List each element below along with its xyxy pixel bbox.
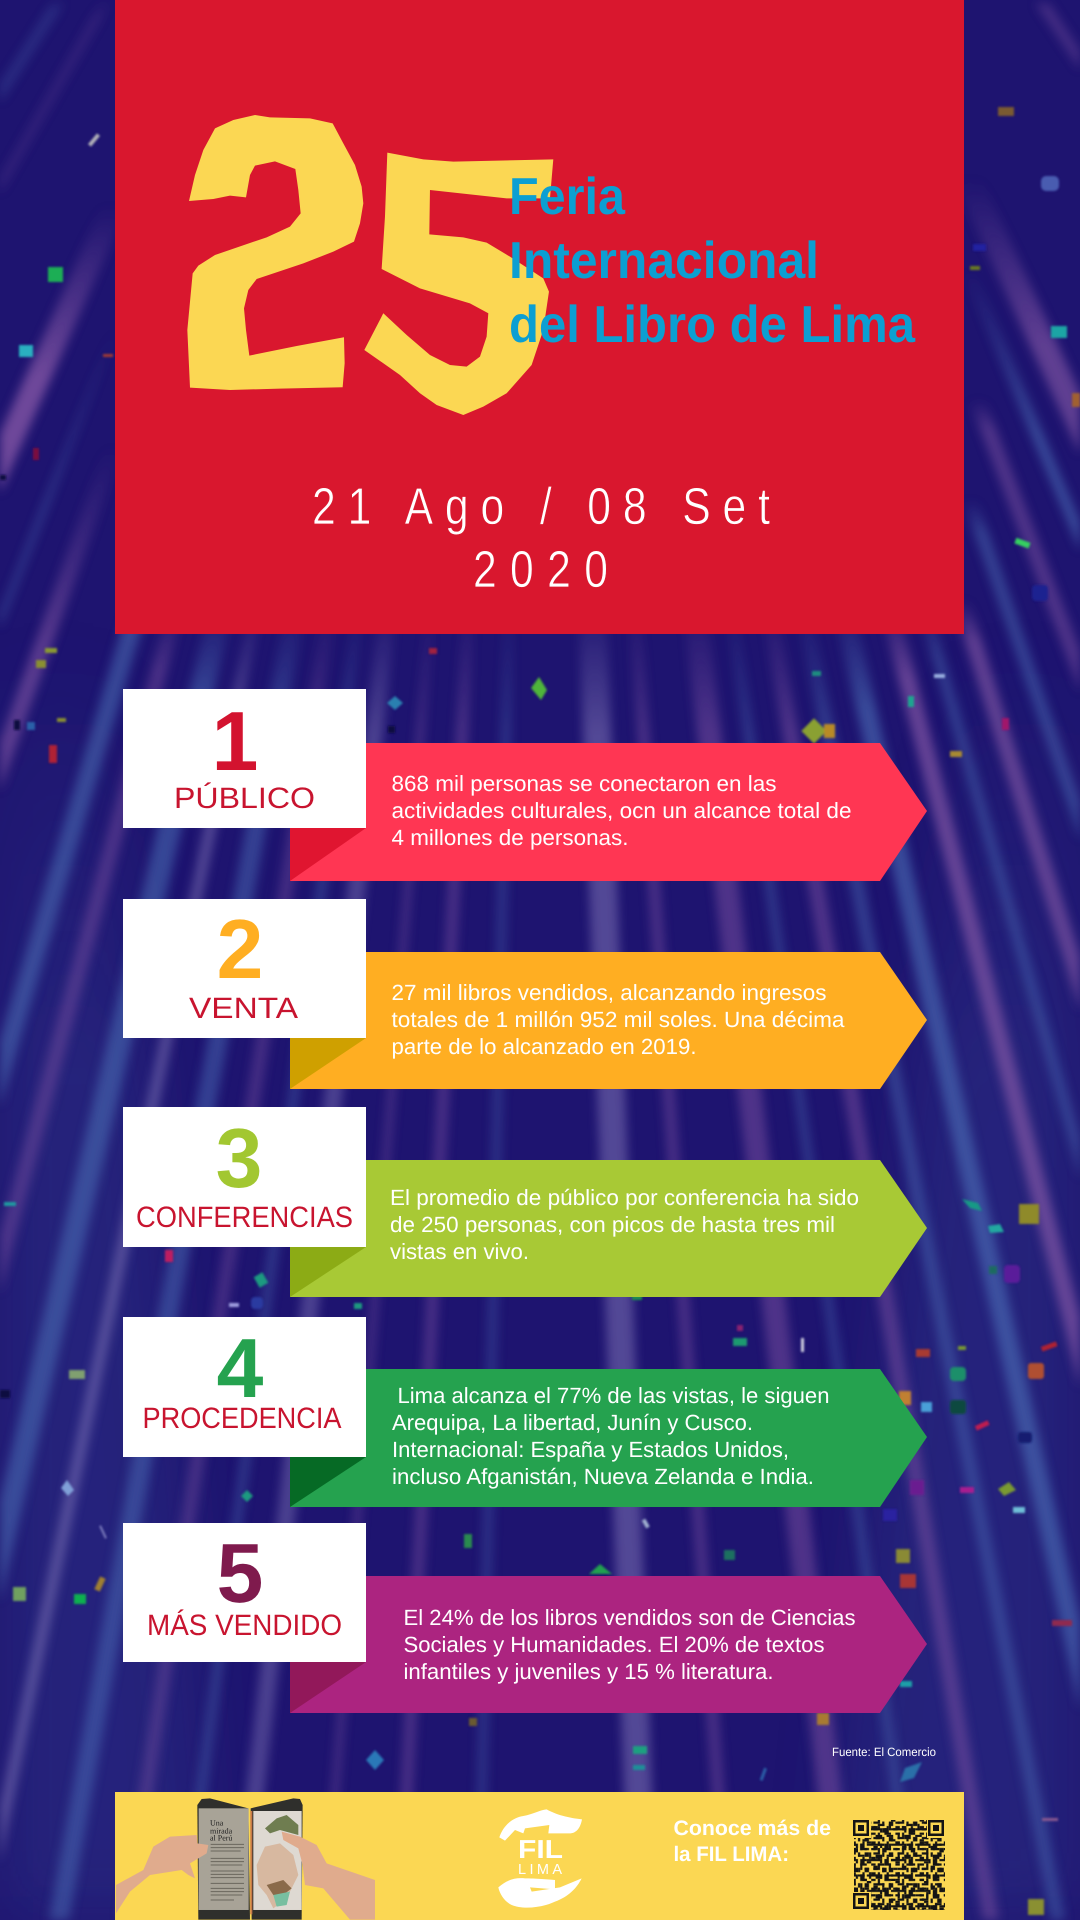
description: [392, 980, 845, 1059]
panel: 2 venta: [123, 899, 927, 1089]
description: [392, 1383, 830, 1489]
source note: Fuente: El Comercio: [832, 1745, 936, 1759]
ribbon: [290, 1576, 927, 1713]
call to action: [674, 1817, 831, 1866]
label: PROCEDENCIA: [142, 1402, 342, 1435]
description: El 24% de los libros vendidos son de Ciencias: [404, 1605, 856, 1630]
label: MÁS VENDIDO: [147, 1609, 342, 1642]
call to action: Conoce más de: [674, 1817, 831, 1840]
logo: FIL LIMA: [498, 1809, 582, 1908]
panel: red header: [115, 0, 964, 634]
number: 4: [217, 1321, 264, 1415]
panel: 1 público: [123, 689, 927, 881]
description: Arequipa, La libertad, Junín y Cusco.: [392, 1410, 753, 1435]
card: [123, 1107, 366, 1247]
ribbon: [290, 743, 927, 881]
number: 3: [216, 1111, 262, 1205]
icon: QR code: [853, 1820, 945, 1910]
card: [123, 689, 366, 828]
number: 1: [212, 694, 258, 788]
description: [390, 1185, 859, 1264]
description: 4 millones de personas.: [392, 825, 628, 850]
illustration: hands holding a folding phone: mirada: [210, 1827, 232, 1835]
description: vistas en vivo.: [390, 1239, 529, 1264]
description: El promedio de público por conferencia ha sido: [390, 1185, 859, 1210]
label: VENTA: [189, 992, 298, 1025]
description: 27 mil libros vendidos, alcanzando ingresos: [392, 980, 826, 1005]
call to action: la FIL LIMA:: [674, 1843, 789, 1866]
card: [123, 899, 366, 1038]
logo: FIL LIMA: LIMA: [518, 1862, 562, 1878]
card: [123, 1523, 366, 1662]
title: del Libro de Lima: [509, 296, 916, 354]
ribbon fold: [290, 828, 366, 881]
ribbon fold: [290, 1457, 366, 1507]
description: totales de 1 millón 952 mil soles. Una décima: [392, 1007, 845, 1032]
dates: [312, 478, 770, 599]
ribbon: [290, 1369, 927, 1507]
panel: yellow footer: [115, 1792, 964, 1920]
description: 868 mil personas se conectaron en las: [392, 771, 776, 796]
ribbon fold: [290, 1247, 366, 1297]
description: parte de lo alcanzado en 2019.: [392, 1034, 696, 1059]
logo: FIL LIMA: FIL: [518, 1834, 563, 1864]
title: [509, 168, 916, 354]
big number 25: [187, 115, 553, 415]
dates: 2020: [473, 541, 608, 599]
title: Feria: [509, 168, 626, 226]
ribbon fold: [290, 1662, 366, 1713]
dates: 21 Ago / 08 Set: [312, 478, 770, 536]
description: Internacional: España y Estados Unidos,: [392, 1437, 789, 1462]
ribbon: [290, 1160, 927, 1297]
illustration: hands holding a folding phone: Una: [210, 1819, 223, 1828]
description: [392, 771, 852, 850]
label: PÚBLICO: [174, 782, 315, 815]
description: [404, 1605, 856, 1684]
description: de 250 personas, con picos de hasta tres mil: [390, 1212, 835, 1237]
card: [123, 1317, 366, 1457]
number: 2: [217, 902, 263, 996]
label: CONFERENCIAS: [136, 1201, 353, 1234]
description: Sociales y Humanidades. El 20% de textos: [404, 1632, 824, 1657]
description: infantiles y juveniles y 15 % literatura.: [404, 1659, 774, 1684]
panel: 4 procedencia: [123, 1317, 927, 1507]
panel: 5 más vendido: [123, 1523, 927, 1713]
title: Internacional: [509, 232, 819, 290]
description: incluso Afganistán, Nueva Zelanda e India.: [392, 1464, 814, 1489]
description: Lima alcanza el 77% de las vistas, le siguen: [398, 1383, 830, 1408]
description: actividades culturales, ocn un alcance total de: [392, 798, 852, 823]
panel: 3 conferencias: [123, 1107, 927, 1297]
illustration: hands holding a folding phone: al Perú: [210, 1834, 232, 1843]
ribbon: [290, 952, 927, 1089]
illustration: hands holding a folding phone: [116, 1798, 375, 1920]
ribbon fold: [290, 1038, 366, 1089]
number: 5: [217, 1526, 263, 1620]
